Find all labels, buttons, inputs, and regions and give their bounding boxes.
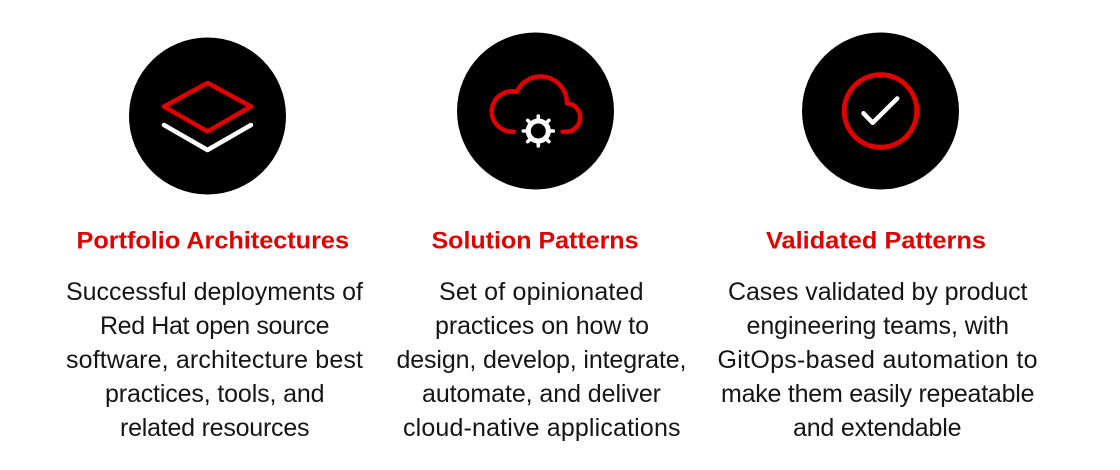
heading: Portfolio Architectures: Portfolio Architectures xyxy=(76,228,349,254)
text block: Solution Patterns description: design, develop, integrate, xyxy=(396,346,686,374)
text block: Solution Patterns description: cloud-native applications xyxy=(403,414,680,442)
text block: Portfolio Architectures description: related resources xyxy=(120,414,310,442)
text block: Portfolio Architectures description xyxy=(66,278,363,442)
text block: Validated Patterns description: GitOps-based automation to xyxy=(718,346,1038,374)
text block: Validated Patterns description: make them easily repeatable xyxy=(721,380,1034,408)
panel: Portfolio Architectures xyxy=(66,38,363,442)
panel: Solution Patterns xyxy=(396,32,686,442)
text block: Solution Patterns description xyxy=(396,278,686,442)
text block: Validated Patterns description: and extendable xyxy=(793,414,962,442)
text block: Validated Patterns description: Cases validated by product xyxy=(728,278,1028,306)
text block: Validated Patterns description xyxy=(718,278,1038,442)
icon: layered diamonds xyxy=(129,38,286,194)
icon: check mark in circle xyxy=(802,32,959,190)
heading: Solution Patterns: Solution Patterns xyxy=(432,228,638,254)
text block: Solution Patterns description: practices on how to xyxy=(435,312,649,340)
heading: Validated Patterns: Validated Patterns xyxy=(766,228,986,254)
text block: Portfolio Architectures description: Red Hat open source xyxy=(100,312,330,340)
text block: Solution Patterns description: automate, and deliver xyxy=(422,380,661,408)
text block: Portfolio Architectures description: practices, tools, and xyxy=(105,380,324,408)
text block: Portfolio Architectures description: Successful deployments of xyxy=(66,278,363,306)
text block: Validated Patterns description: engineering teams, with xyxy=(746,312,1009,340)
panel: Validated Patterns xyxy=(718,32,1038,442)
text block: Solution Patterns description: Set of opinionated xyxy=(439,278,644,306)
text block: Portfolio Architectures description: software, architecture best xyxy=(66,346,363,374)
icon: cloud with gear xyxy=(457,32,614,190)
